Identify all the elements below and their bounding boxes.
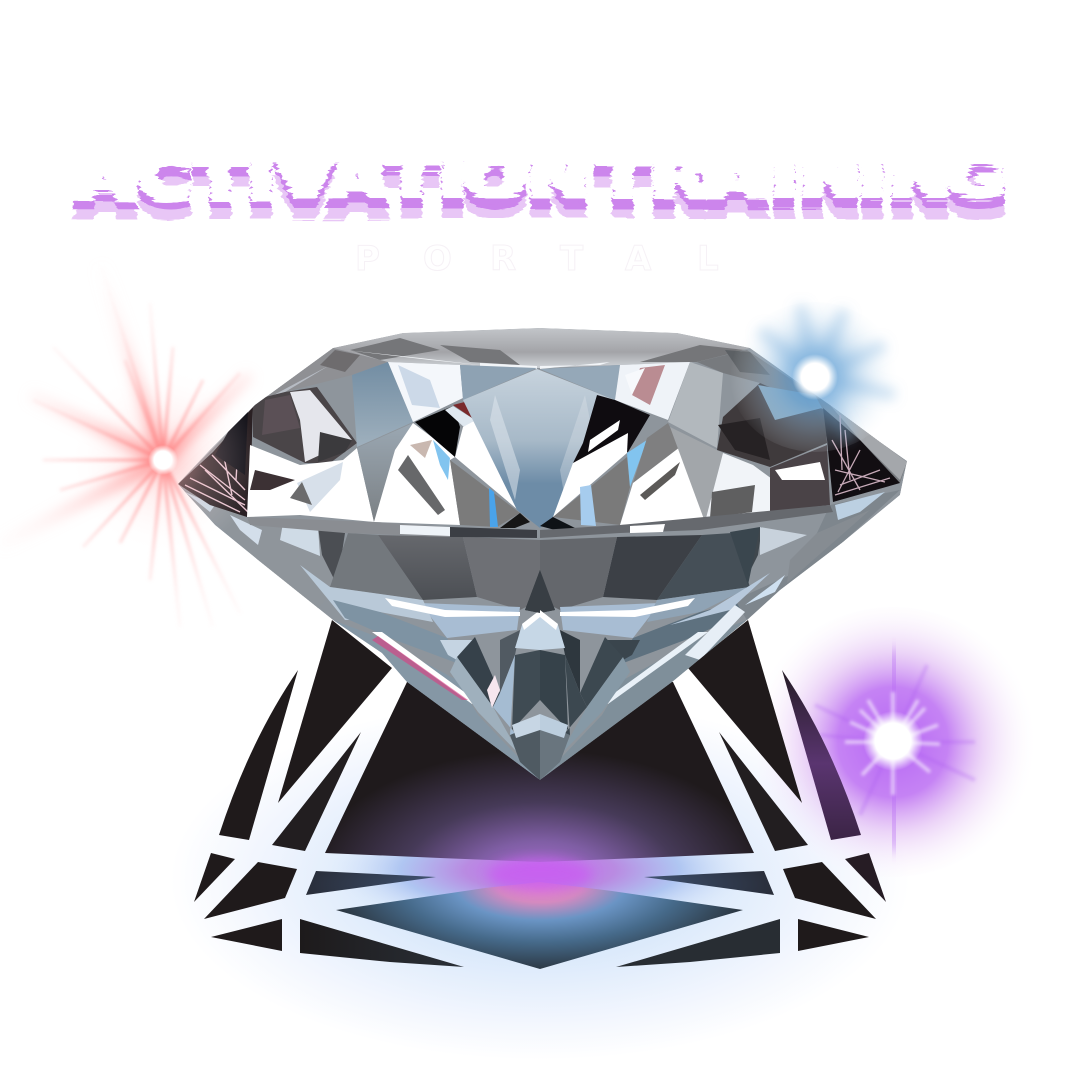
far right black — [823, 408, 900, 502]
pink thin rays — [33, 262, 240, 627]
crown right facets — [540, 362, 900, 530]
crown table streaks — [350, 338, 745, 365]
base right facets — [616, 620, 886, 967]
subtitle portal: PORTAL — [355, 239, 719, 279]
sparkle: blue star top right — [730, 302, 900, 452]
far left dark facet — [178, 407, 253, 517]
white kite right — [615, 362, 690, 420]
heading shadow mid: ACTIVATIONTRAINING — [76, 157, 1006, 219]
dark facet right — [717, 383, 827, 467]
grey right triangles — [553, 457, 630, 525]
pink core — [148, 445, 178, 475]
sparkle: pink star left — [0, 262, 258, 627]
pink wide rays — [0, 265, 250, 545]
heading white face: ACTIVATIONTRAINING — [76, 147, 1006, 209]
pedestal: faceted diamond base — [194, 620, 886, 969]
purple halo — [750, 607, 1036, 877]
sky chip right — [627, 440, 647, 487]
base lower central facet — [336, 882, 743, 969]
white right field — [620, 447, 705, 525]
pink halo — [68, 365, 258, 555]
blue core — [792, 354, 838, 400]
grey kite right — [668, 362, 723, 448]
sky blue chip — [433, 440, 450, 480]
crown centre kite — [463, 369, 615, 528]
crown left rim — [178, 348, 388, 484]
white lower left — [247, 445, 374, 522]
diamond silhouette — [178, 328, 907, 780]
pavilion left half — [178, 488, 555, 780]
crown left facets — [178, 362, 537, 528]
base left facets — [194, 620, 464, 967]
black facet — [415, 406, 460, 457]
black streak — [573, 395, 650, 463]
far right streaks — [832, 415, 890, 495]
white triangle — [455, 422, 516, 509]
base central magenta hotspot — [488, 859, 592, 891]
crown table band — [333, 328, 750, 368]
upper right grey blue — [540, 365, 620, 400]
title: Activation Training Portal — [76, 147, 1006, 279]
lower grey kite right — [670, 427, 723, 522]
dark facet — [253, 387, 357, 463]
base upper central facet — [325, 682, 754, 862]
sparkle: purple star right — [750, 607, 1036, 877]
white wedge — [553, 433, 628, 517]
grey mid — [633, 423, 680, 483]
white cluster right — [706, 453, 770, 517]
purple soft rays — [893, 650, 895, 850]
white kite — [388, 362, 463, 422]
pavilion right half — [525, 527, 762, 780]
blue rays — [760, 305, 895, 440]
white field — [374, 423, 460, 525]
base central band glow — [325, 808, 755, 932]
purple faint rays — [815, 665, 975, 815]
blue halo — [730, 302, 900, 452]
grey blue upper — [460, 365, 537, 400]
heading shadow light: ACTIVATIONTRAINING — [76, 168, 1006, 230]
lower grey kite — [357, 423, 413, 522]
pavilion facets — [178, 488, 900, 780]
grey blue kite — [352, 362, 413, 447]
base pale glow — [170, 700, 910, 1060]
diamond — [178, 328, 907, 780]
purple core — [863, 711, 923, 771]
far left streaks — [185, 415, 248, 512]
pavilion right rim — [670, 490, 900, 660]
grey triangle — [450, 460, 520, 527]
infographic canvas — [33, 161, 1014, 1036]
purple white rays — [845, 692, 940, 795]
girdle strip — [247, 505, 833, 538]
crown right rim — [697, 350, 907, 483]
